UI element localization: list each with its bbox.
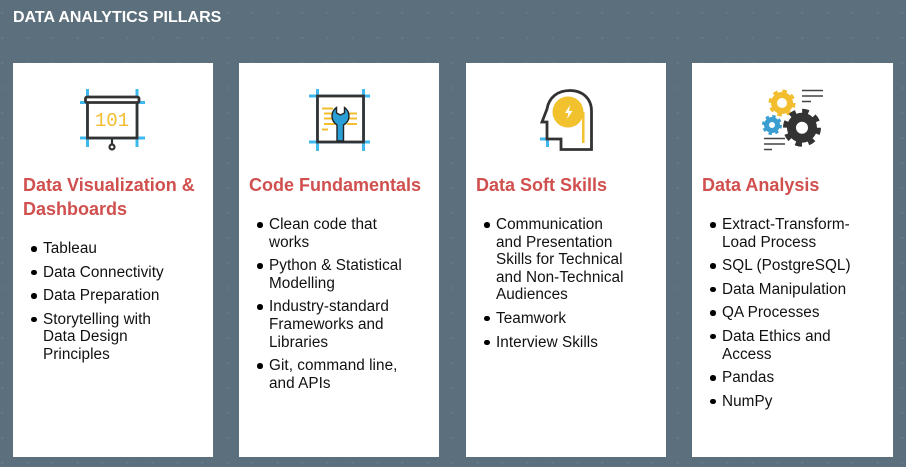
heading: Data Soft Skills [476, 175, 607, 195]
panel: data visualization [13, 63, 213, 457]
list: Data Preparation [43, 287, 159, 304]
panel: data analysis [692, 63, 893, 457]
list: Skills for Technical [496, 251, 623, 268]
list: Industry-standard [269, 298, 389, 315]
list: Modelling [269, 275, 335, 292]
icon: presentation screen: 101 [95, 110, 129, 132]
list: Extract-Transform- [722, 216, 850, 233]
list: Python & Statistical [269, 257, 402, 274]
list: Clean code that [269, 216, 377, 233]
list: Data Ethics and [722, 328, 831, 345]
list: Tableau [43, 240, 97, 257]
list [710, 216, 851, 410]
list: Data Connectivity [43, 264, 164, 281]
heading: Data Analysis [702, 175, 819, 195]
title: DATA ANALYTICS PILLARS [13, 9, 221, 26]
list: Pandas [722, 369, 774, 386]
list: Audiences [496, 286, 568, 303]
list [257, 216, 402, 392]
icon: head with lightning [540, 89, 593, 151]
list: Data Manipulation [722, 281, 846, 298]
list: QA Processes [722, 304, 820, 321]
heading: Data Visualization & [23, 175, 195, 195]
list: Frameworks and [269, 316, 384, 333]
list [484, 216, 624, 351]
list: works [269, 234, 309, 251]
heading: Dashboards [23, 199, 127, 219]
list: Load Process [722, 234, 816, 251]
list: Data Design [43, 328, 128, 345]
icon: gears [762, 90, 823, 150]
list: Communication [496, 216, 603, 233]
heading: Code Fundamentals [249, 175, 421, 195]
panel: soft skills [466, 63, 666, 457]
list: and Non-Technical [496, 269, 624, 286]
list: SQL (PostgreSQL) [722, 257, 851, 274]
list: Interview Skills [496, 334, 598, 351]
list: NumPy [722, 393, 772, 410]
list [31, 240, 164, 363]
list: Access [722, 346, 772, 363]
list: Libraries [269, 334, 328, 351]
list: Storytelling with [43, 311, 151, 328]
heading [23, 175, 195, 219]
list: Git, command line, [269, 357, 397, 374]
icon: wrench on code [309, 89, 370, 151]
list: and Presentation [496, 234, 612, 251]
panel: code fundamentals [239, 63, 439, 457]
list: Principles [43, 346, 110, 363]
list: Teamwork [496, 310, 566, 327]
list: and APIs [269, 375, 331, 392]
icon: presentation screen [80, 89, 145, 151]
